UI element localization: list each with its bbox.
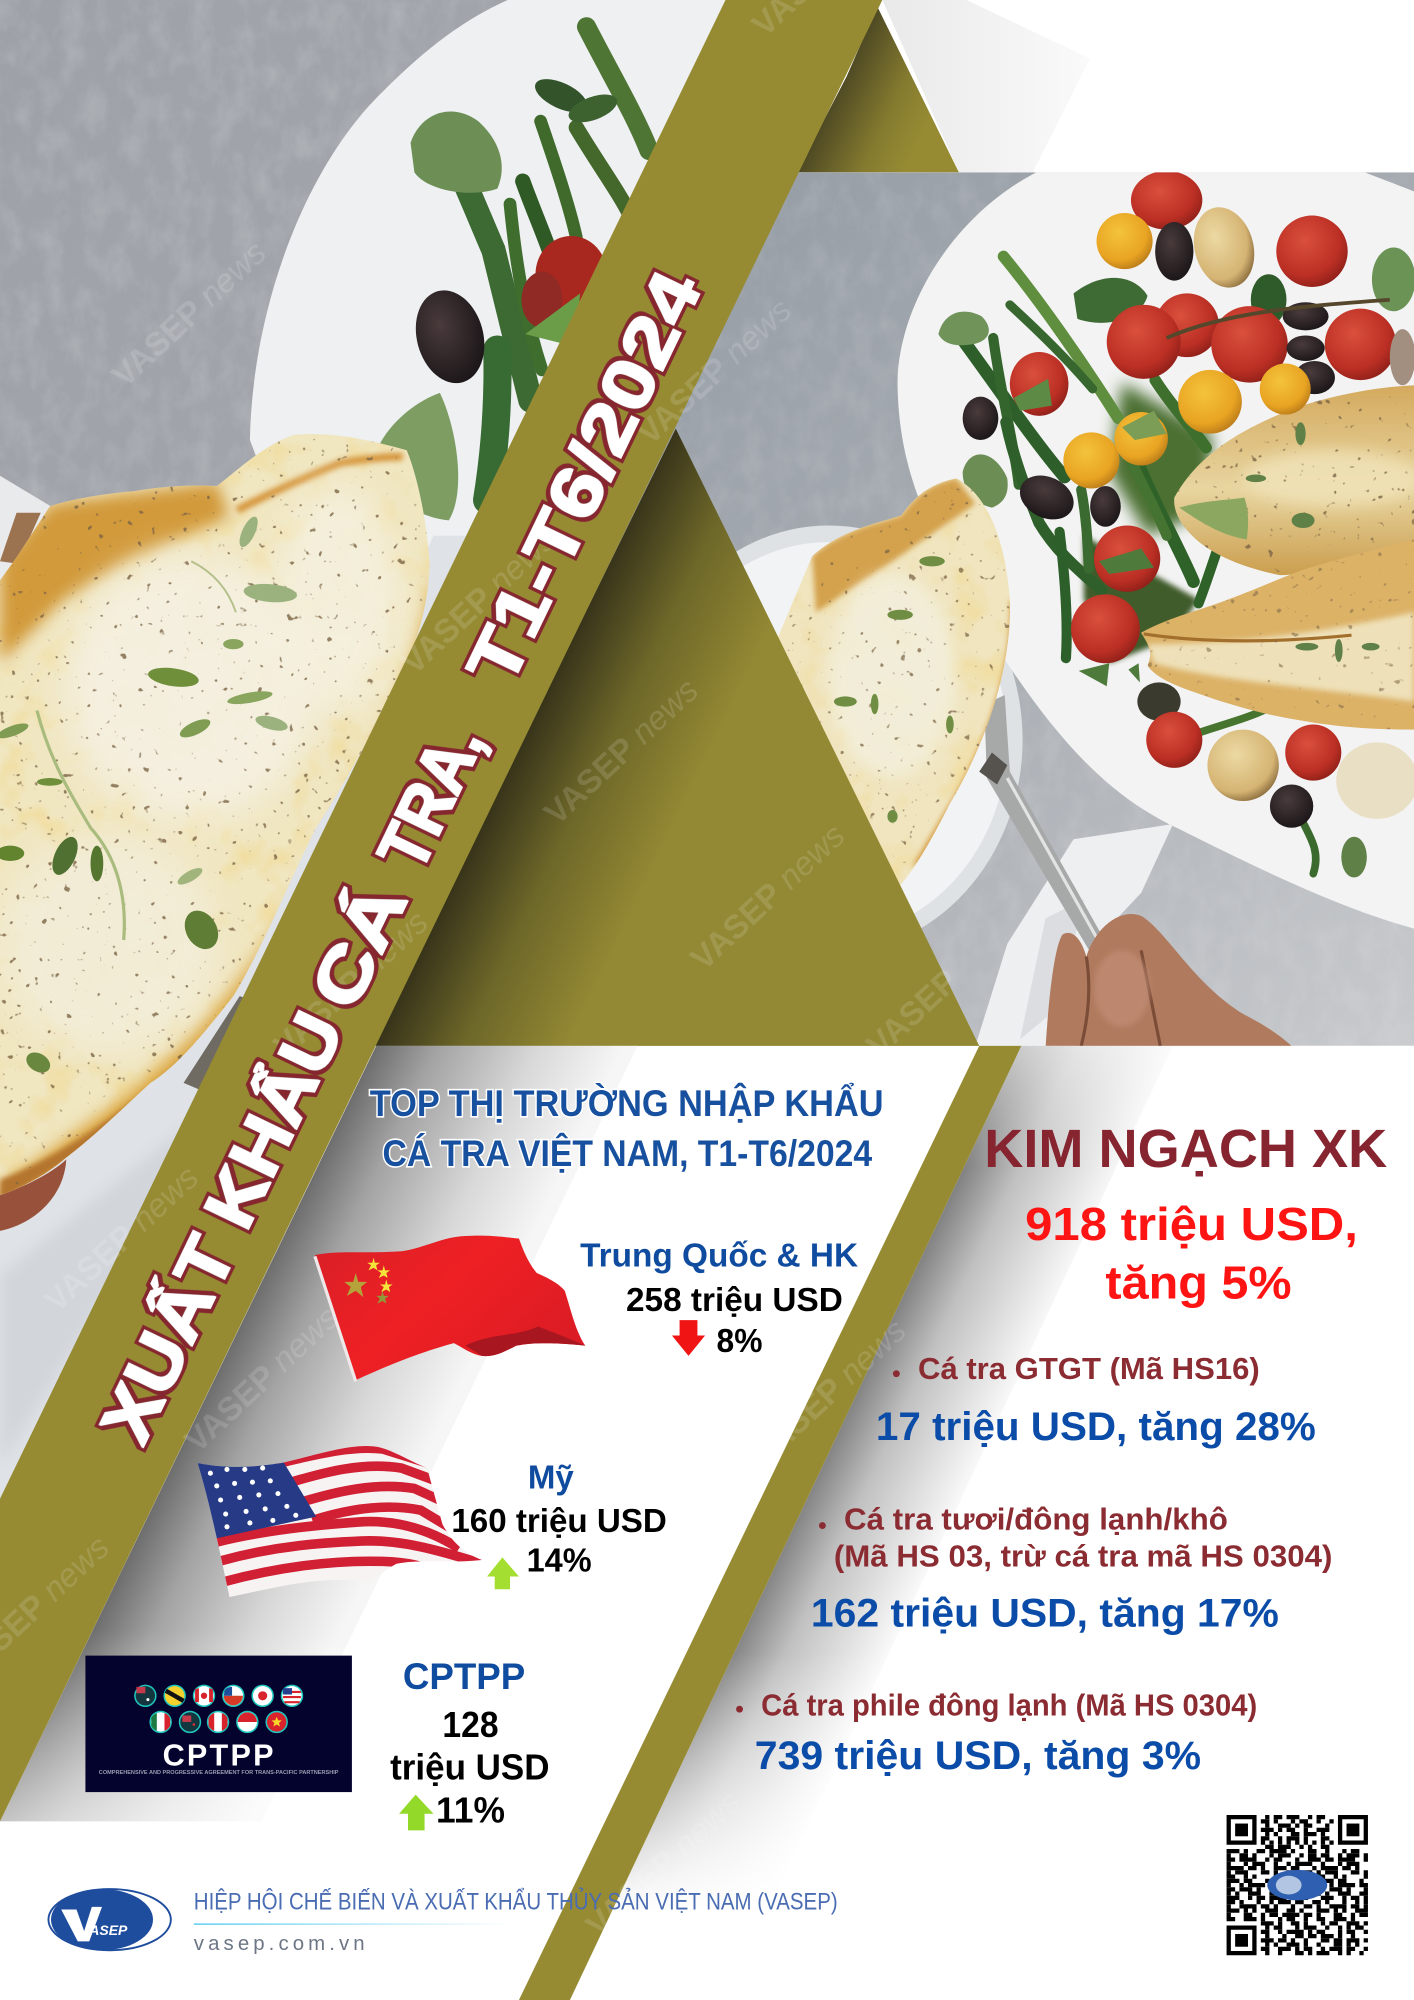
market value: 258 triệu USD xyxy=(626,1282,843,1319)
watermarks: VASEP xyxy=(860,962,966,1065)
left fillet xyxy=(0,421,440,1224)
section heading: top import markets: CÁ TRA VIỆT NAM, T1-T6/2024 xyxy=(383,1132,873,1174)
item: value-added pangasius: Cá tra GTGT (Mã HS16) xyxy=(918,1352,1260,1386)
item: value-added pangasius: 17 triệu USD, tăng 28% xyxy=(876,1405,1316,1449)
hand xyxy=(1046,914,1294,1048)
photo right: plate of fish and vegetables xyxy=(357,171,1414,1048)
icon: up arrow xyxy=(487,1557,519,1589)
watermarks: VASEP news xyxy=(630,292,799,452)
item: frozen fillet: Cá tra phile đông lạnh (Mã HS 0304) xyxy=(761,1689,1257,1723)
tomato left xyxy=(536,236,602,308)
icon: VASEP logo xyxy=(48,1889,171,1950)
small side plate xyxy=(0,476,51,584)
item: fresh, frozen, dried pangasius: (Mã HS 03, trừ cá tra mã HS 0304) xyxy=(834,1539,1332,1573)
CPTPP logo box: CPTPP xyxy=(163,1738,273,1772)
main title on band: CÁ xyxy=(296,872,422,1021)
tomatoes, olives and potatoes xyxy=(938,171,1414,878)
black olive left xyxy=(416,290,484,384)
CPTPP logo box: COMPREHENSIVE AND PROGRESSIVE AGREEMENT FOR TRANS-PACIFIC PARTNERSHIP xyxy=(99,1770,339,1776)
watermarks: VASEP news xyxy=(178,1299,346,1460)
watermarks: VASEP news xyxy=(537,672,706,832)
footer organisation name: HIỆP HỘI CHẾ BIẾN VÀ XUẤT KHẨU THỦY SẢN VIỆT NAM (VASEP) xyxy=(194,1886,838,1914)
watermarks: VASEP news xyxy=(745,1312,914,1473)
heading: KIM NGẠCH XK: KIM NGẠCH XK xyxy=(984,1120,1388,1179)
market value: 160 triệu USD xyxy=(451,1503,667,1540)
watermarks: VASEP news xyxy=(105,234,274,395)
watermarks: VASEP news xyxy=(684,817,852,978)
right shading beside thin band xyxy=(561,1046,1173,2000)
lower left grey shading xyxy=(0,1046,638,1821)
market name: Mỹ xyxy=(528,1460,574,1497)
thin olive diagonal band xyxy=(519,1046,1021,2000)
panel: export value xyxy=(736,1120,1388,1778)
percent change: 11% xyxy=(436,1791,505,1831)
market name: CPTPP xyxy=(403,1656,525,1697)
total value: 918 triệu USD, xyxy=(1025,1198,1358,1250)
side plate xyxy=(736,526,1022,928)
market: United States xyxy=(191,1441,667,1601)
percent change: 14% xyxy=(527,1542,592,1579)
upper right fillet xyxy=(1167,376,1414,580)
market value: 128 xyxy=(442,1705,499,1745)
lower right fillet xyxy=(1135,536,1414,740)
main title on band: TRA, xyxy=(363,712,498,882)
footer website: vasep.com.vn xyxy=(194,1933,365,1955)
market name: Trung Quốc & HK xyxy=(580,1238,858,1275)
tomato under fillet xyxy=(0,1159,66,1231)
main title on band: T1-T6/2024 xyxy=(452,259,716,697)
icon: down arrow xyxy=(672,1320,705,1356)
leaves left xyxy=(411,111,502,193)
watermarks xyxy=(0,0,966,1945)
white serving plate xyxy=(250,0,726,547)
footer divider xyxy=(194,1923,513,1925)
item: frozen fillet: 739 triệu USD, tăng 3% xyxy=(755,1734,1201,1778)
section heading: top import markets: TOP THỊ TRƯỜNG NHẬP KHẨU xyxy=(370,1082,884,1124)
item: fresh, frozen, dried pangasius: 162 triệu USD, tăng 17% xyxy=(811,1591,1279,1635)
icon: up arrow xyxy=(399,1795,434,1830)
fork xyxy=(979,695,1107,954)
percent change: 8% xyxy=(717,1323,762,1360)
olive triangle top xyxy=(797,6,959,172)
green beans and leaves xyxy=(455,27,649,500)
total value: tăng 5% xyxy=(1105,1256,1292,1308)
icon: US flag xyxy=(191,1441,491,1601)
item: value-added pangasius xyxy=(876,1352,1316,1449)
market: China and Hong Kong xyxy=(315,1236,858,1381)
watermarks: VASEP news xyxy=(38,1159,206,1320)
lower plate under fillet xyxy=(0,536,466,1498)
main title on band xyxy=(86,259,716,1454)
napkin xyxy=(975,824,1173,1046)
main title on band: KHẨU xyxy=(188,1000,359,1240)
watermarks: VASEP news xyxy=(267,904,436,1065)
pale corner polygon top right xyxy=(882,0,1090,172)
watermarks: VASEP news xyxy=(395,521,563,682)
herbs on left fillet xyxy=(0,514,298,1077)
total value xyxy=(1025,1198,1358,1308)
fillet on fork xyxy=(765,472,1026,893)
photo left: fish fillet on plate xyxy=(0,0,726,1498)
main title on band: XUẤT xyxy=(86,1224,251,1454)
item: fresh, frozen, dried pangasius xyxy=(811,1502,1332,1635)
market: CPTPP xyxy=(85,1656,550,1831)
large olive triangle xyxy=(370,429,979,1046)
CPTPP logo box xyxy=(85,1656,352,1792)
green bean bed xyxy=(1084,536,1199,663)
tomato vine xyxy=(1167,300,1390,338)
section heading: top import markets xyxy=(370,1082,884,1174)
main olive diagonal band xyxy=(0,0,882,1821)
icon: China flag xyxy=(315,1236,585,1381)
watermarks: VASEP news xyxy=(579,1784,748,1945)
item: fresh, frozen, dried pangasius: Cá tra tươi/đông lạnh/khô xyxy=(844,1502,1228,1536)
fork shadow below fillet xyxy=(184,996,243,1090)
market value xyxy=(390,1705,550,1787)
market value: triệu USD xyxy=(390,1747,550,1787)
item: frozen fillet xyxy=(736,1689,1257,1778)
icon: VASEP logo: ASEP xyxy=(88,1922,128,1938)
QR code xyxy=(1227,1815,1368,1955)
large oval plate xyxy=(898,172,1414,929)
